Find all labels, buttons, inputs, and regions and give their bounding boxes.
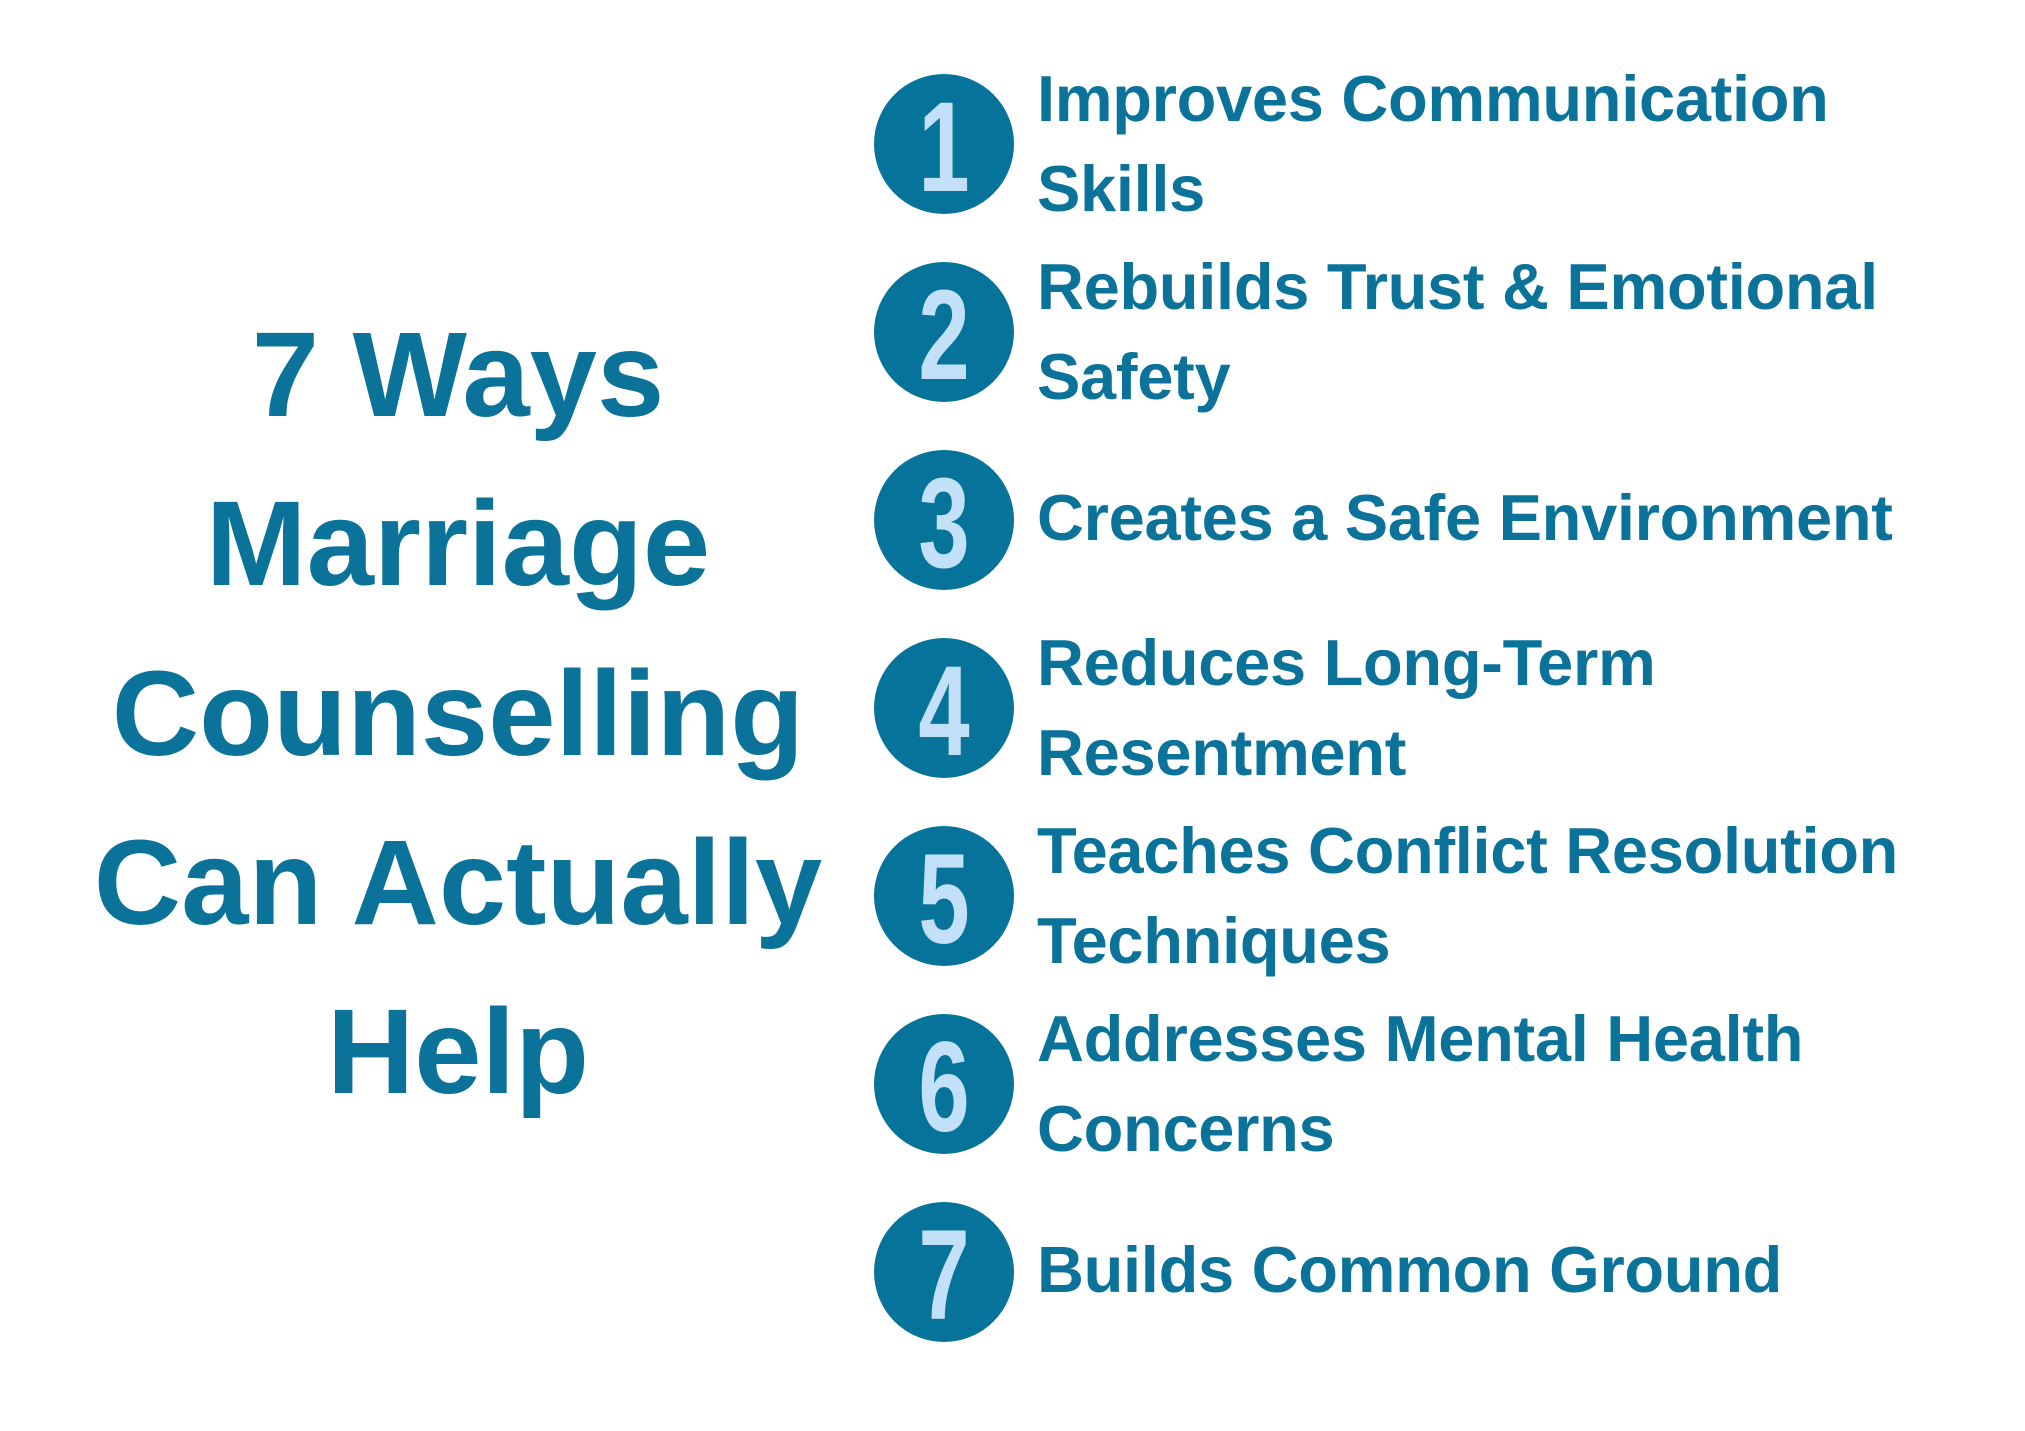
text 2: Rebuilds Trust & Emotional (1037, 250, 1878, 323)
text 3: Creates a Safe Environment (1037, 481, 1893, 554)
text 5 (1037, 814, 1898, 977)
title: 7 Ways (252, 306, 664, 442)
title (94, 306, 822, 1119)
text 5: Techniques (1037, 904, 1390, 977)
icon: number 2 (874, 262, 1014, 402)
text 4 (1037, 626, 1656, 789)
text 4: Resentment (1037, 716, 1406, 789)
item 7 (874, 1202, 1782, 1347)
icon: number 3 (874, 450, 1014, 590)
text 7: Builds Common Ground (1037, 1233, 1782, 1306)
icon: number 5: 5 (918, 828, 970, 971)
text 1: Skills (1037, 152, 1205, 225)
item 5 (874, 814, 1898, 977)
text 6 (1037, 1002, 1803, 1165)
icon: number 7 (874, 1202, 1014, 1342)
icon: number 2: 2 (918, 264, 970, 407)
text 2 (1037, 250, 1878, 413)
item 1 (874, 62, 1829, 225)
icon: number 3: 3 (918, 452, 970, 595)
text 5: Teaches Conflict Resolution (1037, 814, 1898, 887)
title: Counselling (112, 645, 804, 781)
title: Can Actually (94, 814, 822, 950)
icon: number 5 (874, 826, 1014, 966)
item 4 (874, 626, 1656, 789)
icon: number 4 (874, 638, 1014, 778)
icon: number 6 (874, 1014, 1014, 1154)
item 3 (874, 450, 1893, 595)
text 1 (1037, 62, 1829, 225)
text 6: Addresses Mental Health (1037, 1002, 1803, 1075)
title: Help (327, 983, 589, 1119)
icon: number 6: 6 (918, 1016, 970, 1159)
title: Marriage (206, 475, 710, 611)
item 2 (874, 250, 1878, 413)
icon: number 7: 7 (918, 1204, 970, 1347)
text 1: Improves Communication (1037, 62, 1829, 135)
icon: number 4: 4 (918, 640, 970, 783)
icon: number 1 (874, 74, 1014, 214)
text 2: Safety (1037, 340, 1230, 413)
text 4: Reduces Long-Term (1037, 626, 1656, 699)
text 6: Concerns (1037, 1092, 1334, 1165)
icon: number 1: 1 (918, 76, 970, 219)
item 6 (874, 1002, 1803, 1165)
